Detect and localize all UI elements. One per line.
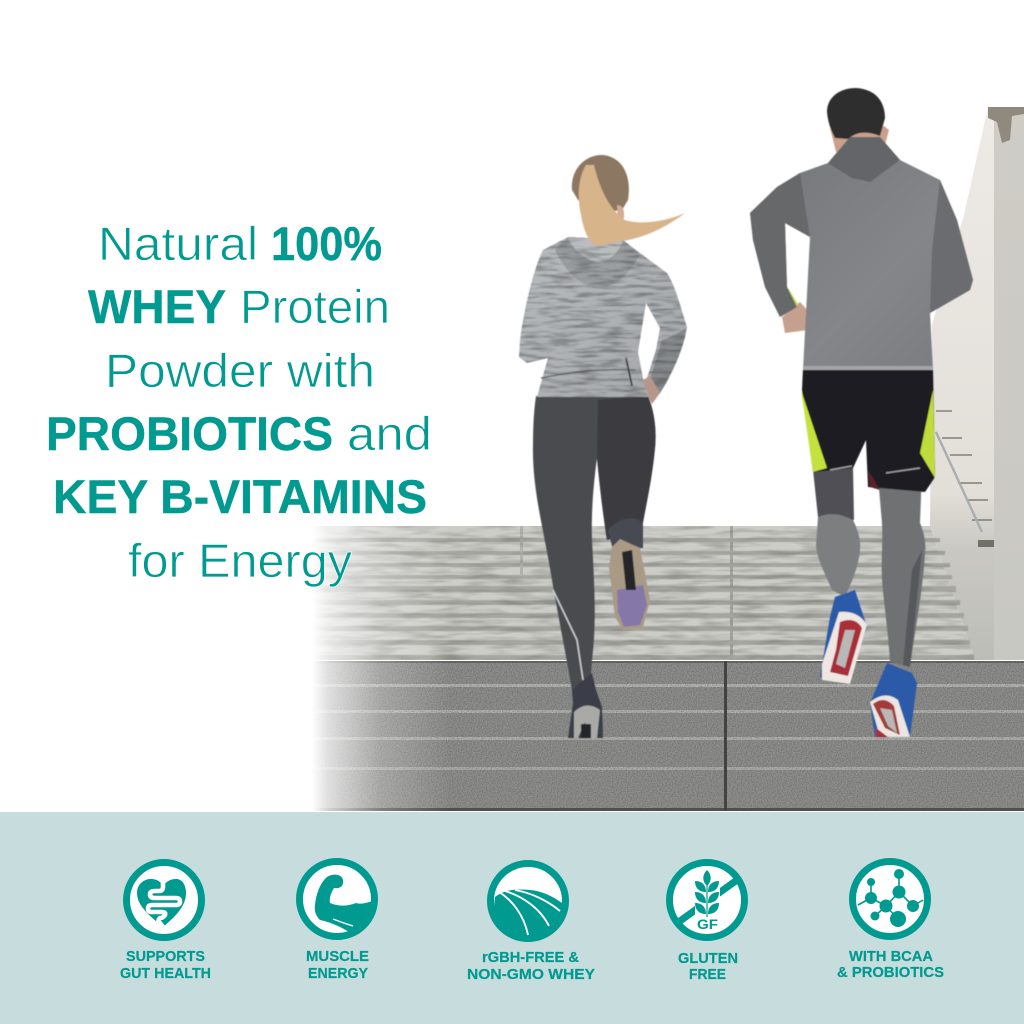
label: rGBH-FREE & [482,949,579,966]
woman runner [519,155,687,738]
icon: molecule [852,862,928,936]
woman: hair [572,155,685,246]
icon: crossed wheat: GF [697,916,718,932]
stone staircase [300,526,1024,811]
icon: heart with intestines [126,862,202,938]
woman: hand [643,376,660,404]
benefit: muscle energy [300,862,376,982]
woman: planted shoe [568,673,603,738]
line 1 [98,217,382,270]
man: hand [782,288,810,333]
man: shorts [801,368,935,492]
line 2: WHEY [88,280,226,333]
label: ENERGY [308,965,368,982]
woman: jacket [519,237,687,397]
label: NON-GMO WHEY [467,966,595,983]
line 1: Natural [98,217,258,270]
label: GLUTEN [678,950,738,967]
line 4: and [347,407,432,460]
man: raised shoe [820,590,867,684]
benefit: gluten free [670,862,744,983]
label: MUSCLE [306,948,369,965]
label: & PROBIOTICS [837,964,944,981]
photo background: white sky [0,0,1024,812]
label: GUT HEALTH [120,965,211,982]
line 5: KEY B-VITAMINS [53,470,427,523]
benefit: rGBH-free and non-GMO [467,864,595,983]
line 4: PROBIOTICS [46,407,333,460]
label: FREE [689,966,726,983]
benefit: BCAA and probiotics [837,862,944,981]
near stairs [300,661,1024,811]
icon: flexed arm [300,862,376,945]
man: legs [813,467,925,667]
line 2: Protein [240,280,390,333]
line 6: for Energy [128,534,353,587]
label [837,948,944,981]
woman: raised shoe [609,539,650,630]
label [467,949,595,983]
label [120,948,211,982]
label: WITH BCAA [849,948,933,965]
label [678,950,738,983]
man: planted shoe [870,663,917,737]
man: head [827,88,889,152]
benefit: gut health [120,862,211,982]
far stairs [300,526,975,660]
label [306,948,369,982]
man runner [750,88,973,737]
headline [46,217,432,587]
icon: farm field [490,864,566,945]
line 1: 100% [271,217,382,270]
label: SUPPORTS [126,948,205,965]
woman: legs [533,396,656,690]
bottom benefits band [0,812,1024,1024]
line 2 [88,280,390,333]
line 3: Powder with [105,344,375,397]
man: jacket [750,137,973,370]
concrete wall [930,107,1024,660]
